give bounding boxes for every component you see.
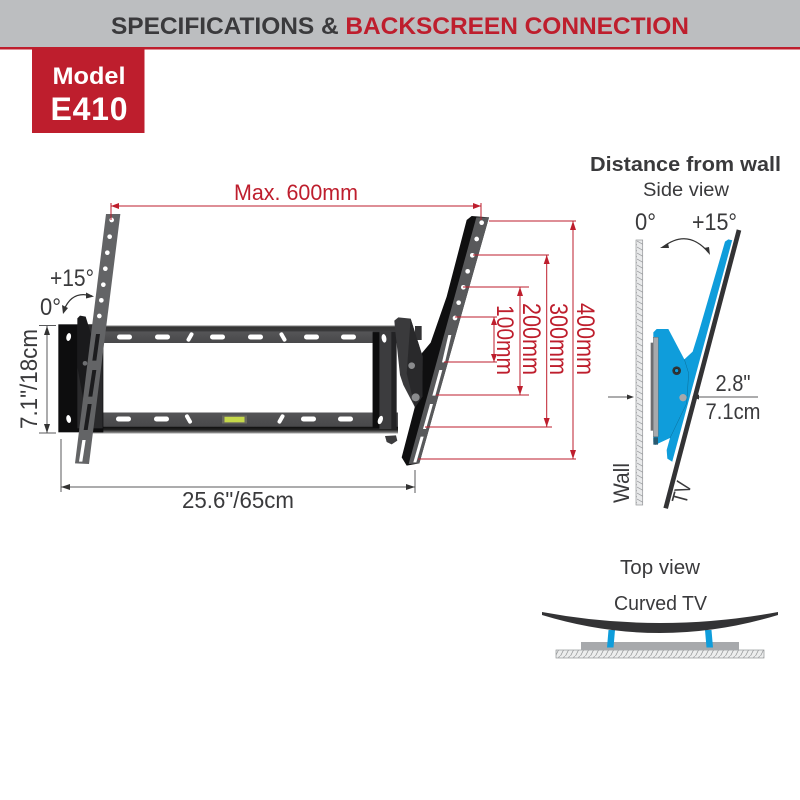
label: side view: Side view — [643, 180, 729, 201]
title: SPECIFICATIONS & BACKSCREEN CONNECTION — [111, 13, 689, 40]
dimension: max 600mm — [111, 180, 481, 220]
tilt label side — [635, 209, 737, 255]
side view diagram — [636, 230, 739, 508]
dimension: width 25.6in / 65cm — [61, 439, 415, 513]
model badge: E410 — [50, 91, 128, 127]
model badge: Model — [52, 63, 126, 90]
blue bracket — [653, 239, 733, 462]
label: top view: Top view — [620, 557, 701, 579]
dimension: 300mm: 300mm — [544, 303, 572, 375]
blue arms — [607, 630, 713, 648]
header band — [0, 0, 800, 50]
tilt label left: 0° — [40, 294, 61, 321]
dimension: 200mm: 200mm — [517, 303, 545, 375]
rails — [92, 326, 398, 434]
mount front view — [58, 214, 489, 466]
tilt label side: +15° — [692, 209, 737, 236]
tv panel — [666, 230, 739, 508]
dimension: 300mm — [425, 255, 572, 427]
left bracket and strap — [58, 214, 120, 464]
dimension: 100mm: 100mm — [491, 305, 518, 375]
dimension: max 600mm: Max. 600mm — [234, 180, 358, 205]
model badge — [32, 49, 144, 133]
distance arrows — [608, 394, 758, 400]
wall — [636, 240, 643, 505]
dimension: 400mm — [418, 221, 599, 459]
dimension: 400mm: 400mm — [571, 303, 599, 375]
right bracket and strap — [373, 216, 489, 466]
label: TV: TV — [667, 478, 697, 506]
dimension: height 7.1in / 18cm — [16, 326, 56, 433]
wall plate — [581, 642, 739, 650]
icon: bubble level — [222, 416, 247, 424]
label: 2.8in: 2.8" — [716, 370, 750, 396]
dimension: width 25.6in / 65cm: 25.6"/65cm — [182, 487, 294, 513]
label: wall: Wall — [609, 463, 634, 503]
tv curve — [542, 612, 778, 633]
tilt label left — [40, 265, 94, 321]
dimension: 100mm — [444, 305, 518, 375]
wall strip — [556, 650, 764, 658]
tilt label left: +15° — [50, 265, 94, 292]
heading: distance from wall: Distance from wall — [590, 153, 781, 176]
curved tv top view diagram — [542, 612, 778, 658]
tilt label side: 0° — [635, 209, 656, 236]
dimension: height 7.1in / 18cm: 7.1"/18cm — [16, 329, 43, 429]
label: 7.1cm: 7.1cm — [706, 399, 760, 424]
label: curved TV: Curved TV — [614, 593, 708, 615]
dimension: 200mm — [436, 287, 545, 395]
